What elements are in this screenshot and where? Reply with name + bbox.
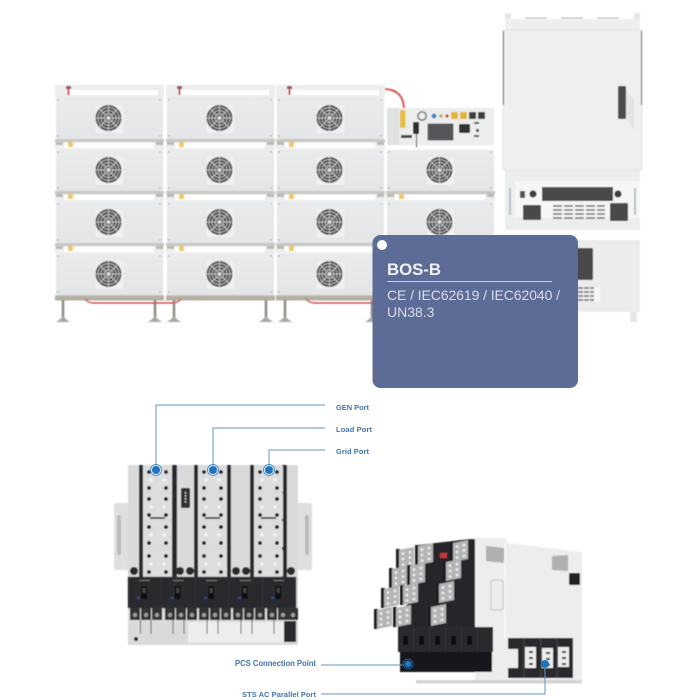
cabinet top frame <box>505 13 640 31</box>
lower base plate <box>134 620 296 643</box>
black bus stack <box>398 539 475 627</box>
callout: Grid Port <box>264 447 370 476</box>
round connectors <box>130 567 295 575</box>
terminal row <box>130 608 298 620</box>
product info card <box>372 235 578 388</box>
callout: GEN Port: GEN Port <box>336 403 370 412</box>
callout: PCS Connection Point <box>235 659 413 669</box>
battery modules column 1 <box>55 98 164 298</box>
cabinet door <box>503 30 642 170</box>
side port block <box>508 638 573 678</box>
battery rack: stacked battery modules <box>55 85 495 322</box>
base rails <box>55 296 385 300</box>
battery modules column 4 <box>386 150 495 246</box>
red link cables <box>85 89 404 303</box>
card hole <box>377 240 387 250</box>
port plates <box>143 466 283 576</box>
cabinet base unit <box>505 240 640 322</box>
rack feet <box>56 300 379 322</box>
cabinet frame gap <box>515 230 639 240</box>
battery modules column 2 <box>166 98 275 298</box>
front view: switchgear panel <box>114 465 312 645</box>
black bus strips <box>139 465 287 577</box>
card certifications: CE / IEC62619 / IEC62040 / <box>387 287 560 303</box>
callout: Load Port: Load Port <box>336 425 372 434</box>
card divider <box>387 281 552 282</box>
callout: STS AC Parallel Port <box>242 660 549 699</box>
card title: BOS-B <box>387 261 441 279</box>
cabinet lower section <box>505 170 640 230</box>
side connector and handle <box>491 573 580 610</box>
side handles <box>114 503 312 570</box>
breaker row <box>398 627 493 652</box>
stepped terminal plates <box>374 540 468 629</box>
right view: angled switchgear <box>374 538 582 684</box>
callout: PCS Connection Point: PCS Connection Point <box>235 659 316 668</box>
panel body <box>128 465 298 645</box>
module top caps <box>55 85 385 98</box>
battery modules column 3 <box>276 98 385 298</box>
indicator module <box>181 488 190 508</box>
control box <box>387 108 494 147</box>
device body <box>416 538 582 684</box>
callout: Load Port <box>208 425 372 476</box>
door label windows <box>486 546 568 571</box>
callout: Grid Port: Grid Port <box>336 447 370 456</box>
callout: GEN Port <box>150 403 370 476</box>
breaker band <box>128 577 296 608</box>
lower terminal block <box>400 652 492 672</box>
cabinet: outdoor enclosure <box>503 13 642 322</box>
card certifications: UN38.3 <box>387 304 435 320</box>
callout: STS AC Parallel Port: STS AC Parallel Port <box>242 690 316 699</box>
